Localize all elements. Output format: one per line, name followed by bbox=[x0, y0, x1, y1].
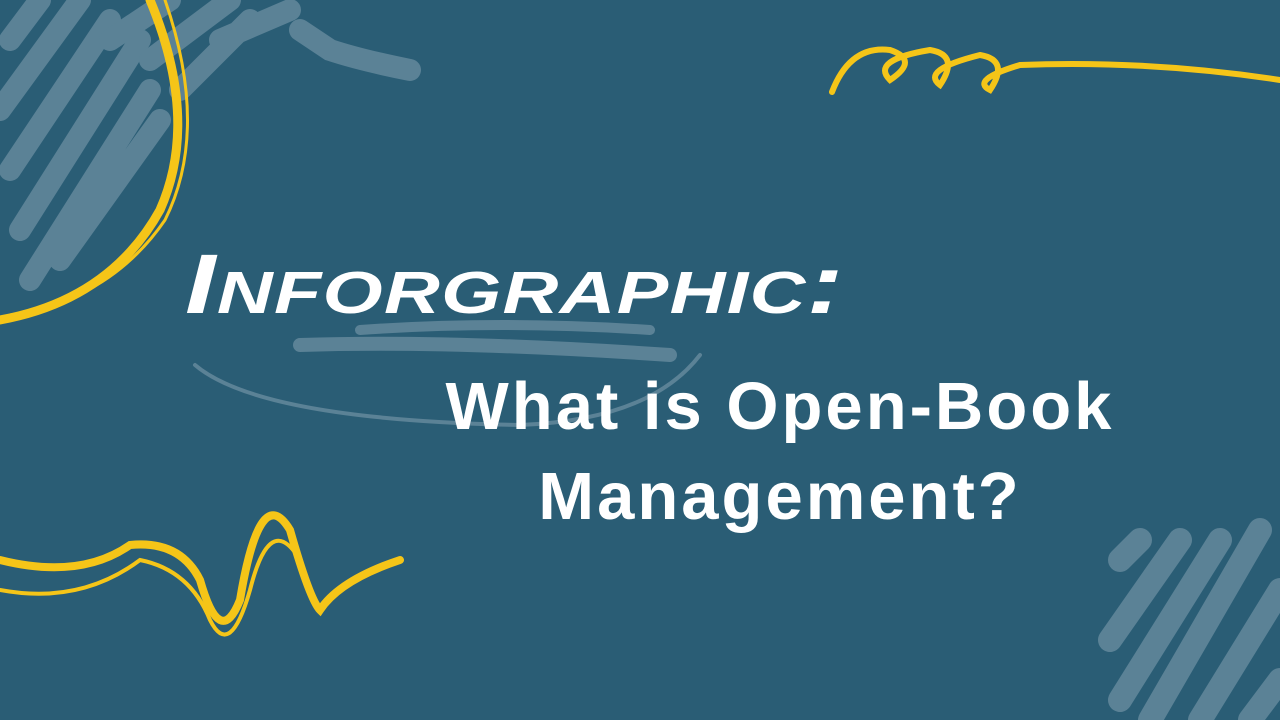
grey swooshes behind title bbox=[195, 325, 700, 425]
yellow squiggle bottom-left bbox=[0, 515, 400, 635]
grey scribble top-left bbox=[0, 0, 410, 280]
title: Inforgraphic: bbox=[185, 237, 845, 331]
grey scribble bottom-right bbox=[1110, 530, 1280, 720]
subtitle: What is Open-Book bbox=[446, 369, 1114, 444]
subtitle bbox=[446, 369, 1114, 534]
yellow loops top-right bbox=[832, 50, 1280, 92]
yellow arc left bbox=[0, 0, 188, 320]
subtitle: Management? bbox=[538, 459, 1022, 534]
